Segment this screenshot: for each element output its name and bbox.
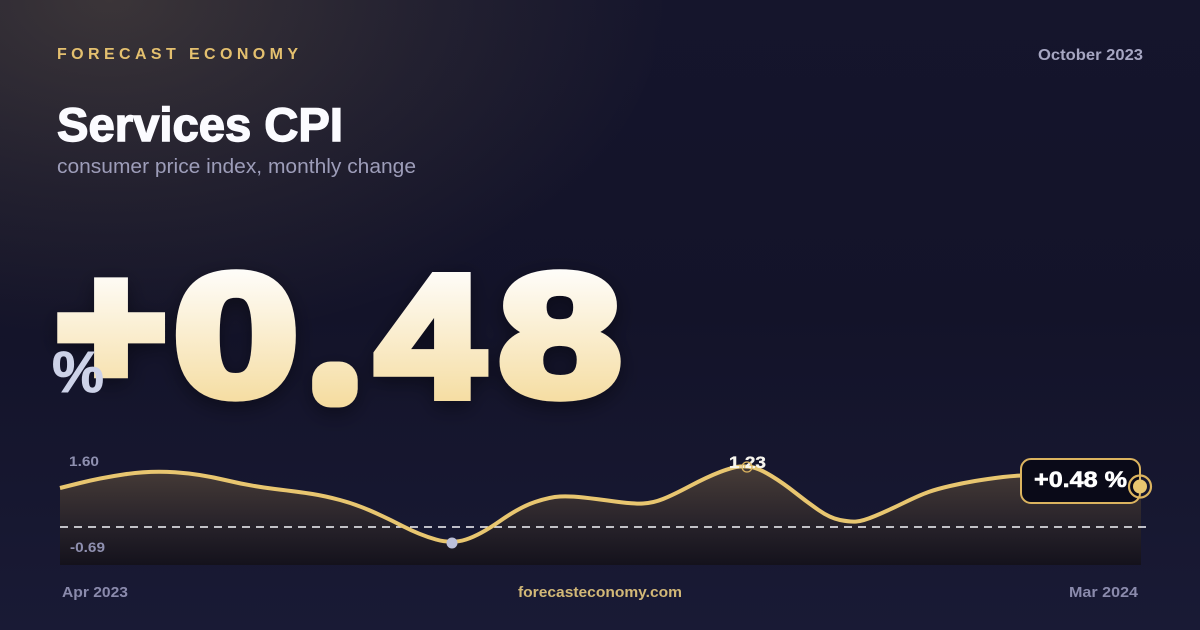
- headline value: 8: [499, 238, 621, 432]
- brand eyebrow: FORECAST ECONOMY: [57, 46, 298, 63]
- current value badge: [1021, 459, 1140, 503]
- peak marker: [742, 462, 752, 472]
- current value badge: +0.48 %: [1034, 467, 1127, 492]
- area under curve: [60, 466, 1141, 565]
- website: forecasteconomy.com: [518, 584, 682, 601]
- subtitle: consumer price index, monthly change: [57, 156, 416, 178]
- peak value label: 1.23: [729, 453, 766, 472]
- headline value: .: [327, 335, 343, 402]
- headline value: 0: [173, 238, 299, 432]
- end date label: Mar 2024: [1069, 584, 1139, 601]
- headline value: 4: [376, 240, 484, 433]
- headline value: +: [56, 227, 166, 423]
- percent unit: %: [52, 340, 104, 405]
- headline value: [56, 227, 621, 433]
- current point marker: [1129, 476, 1151, 498]
- low point marker: [446, 538, 458, 548]
- axis max label: 1.60: [69, 453, 99, 469]
- date label: October 2023: [1038, 47, 1143, 64]
- title: Services CPI: [57, 98, 343, 151]
- zero baseline: [60, 526, 1146, 528]
- start date label: Apr 2023: [62, 584, 128, 601]
- axis min label: -0.69: [70, 539, 105, 555]
- sparkline chart: [60, 453, 1151, 565]
- price line: [60, 466, 1040, 542]
